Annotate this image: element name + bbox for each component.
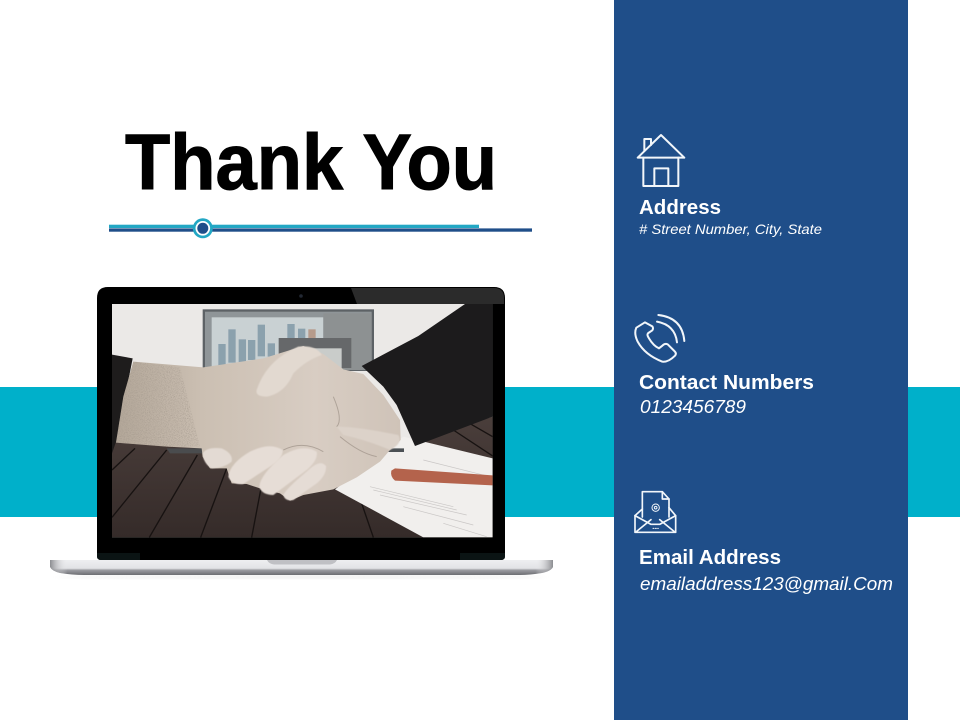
icon: phone [635,315,684,362]
address text: # Street Number, City, State [639,221,822,237]
background monitor [203,309,374,371]
contact: phone [635,315,814,417]
email text: emailaddress123@gmail.Com [640,574,893,594]
contact: email [635,492,893,594]
contact numbers heading: Contact Numbers [639,372,814,394]
paper document [335,437,493,537]
email heading: Email Address [639,547,781,569]
handshake photo [112,304,493,537]
laptop base [50,560,553,579]
wooden table [112,417,493,537]
contact panel background [614,0,908,720]
icon: envelope [635,492,676,532]
icon: house [638,135,684,186]
contact: address [638,135,822,237]
laptop bezel [97,287,505,560]
address heading: Address [639,197,721,219]
background band [0,387,960,517]
laptop [50,287,553,579]
right sleeve [362,304,493,446]
title: Thank You [125,117,497,206]
tablet edge [167,448,205,453]
title divider [109,218,532,238]
red pen [391,468,493,485]
handshake hands [116,346,401,501]
left sleeve [112,355,133,453]
phone number: 0123456789 [640,397,746,417]
